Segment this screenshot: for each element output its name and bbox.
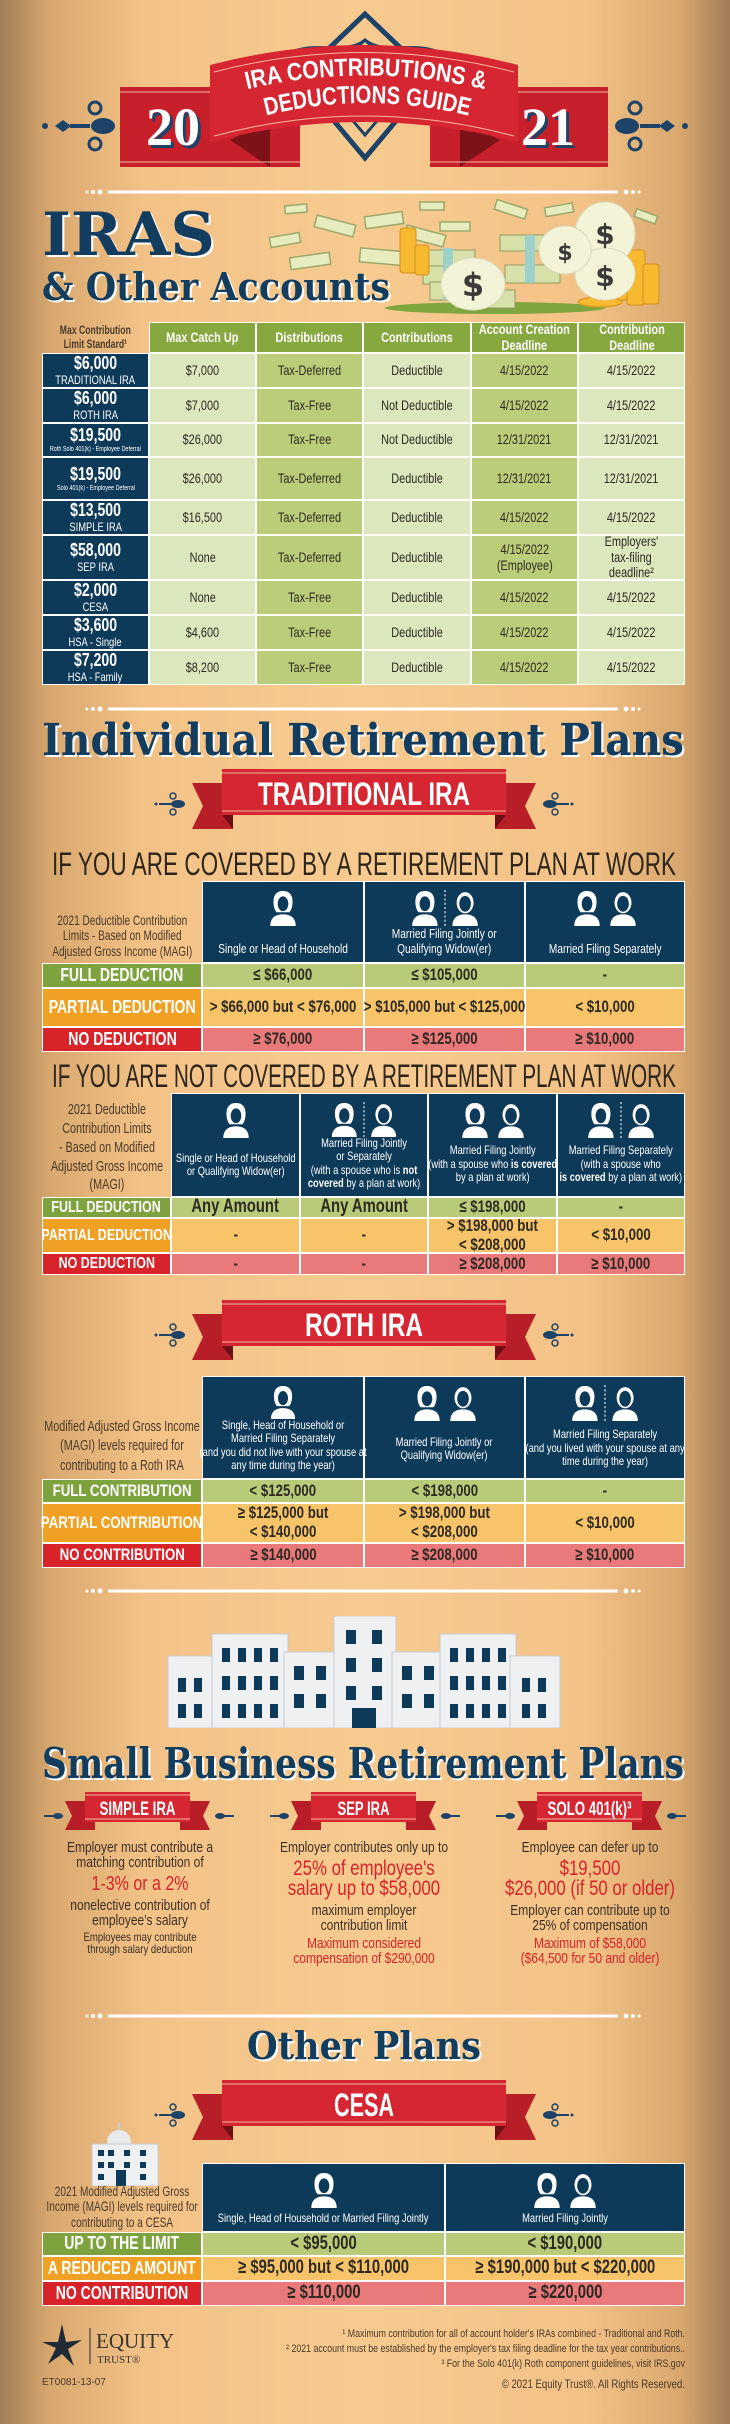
table: CESA: Single, Head of Household or Married Filing Jointly <box>218 2211 429 2225</box>
table: CESA: ≥ $220,000 <box>528 2282 602 2303</box>
table: CESA: < $190,000 <box>528 2233 602 2254</box>
text: SIMPLE IRA details: nonelective contribution of <box>70 1897 210 1914</box>
table: traditional IRA covered: Married Filing Jointly or <box>392 926 497 941</box>
table: Roth IRA: Married Filing Jointly or <box>396 1435 493 1449</box>
header: title banner: 21 <box>521 97 575 157</box>
table: IRAs and other accounts: Account Creation <box>479 321 570 337</box>
table: IRAs and other accounts: 4/15/2022 <box>607 659 656 675</box>
table: traditional IRA covered: Qualifying Widow(er) <box>397 941 492 956</box>
table: traditional IRA covered: Adjusted Gross Income (MAGI) <box>52 943 192 959</box>
panel: SOLO 401(k) <box>496 1792 686 1967</box>
ribbon: SEP IRA <box>270 1792 460 1830</box>
table: IRAs and other accounts: 4/15/2022 <box>607 509 656 525</box>
table: Roth IRA: time during the year) <box>562 1454 648 1468</box>
table: traditional IRA not covered: by a plan at work) <box>456 1170 529 1184</box>
divider <box>86 190 640 194</box>
ribbon: SIMPLE IRA: SIMPLE IRA <box>100 1799 176 1820</box>
table: IRAs and other accounts: Deductible <box>391 549 443 565</box>
table: Roth IRA: ≥ $140,000 <box>250 1545 316 1564</box>
table: traditional IRA covered: Single or Head of Household <box>218 941 348 956</box>
table: IRAs and other accounts: Tax-Deferred <box>278 470 341 486</box>
divider <box>86 706 640 712</box>
table: traditional IRA covered: ≥ $125,000 <box>411 1029 478 1048</box>
table: IRAs and other accounts: Not Deductible <box>381 431 453 447</box>
table: traditional IRA not covered: covered by a plan at work) <box>308 1176 420 1190</box>
table: traditional IRA not covered: Any Amount <box>192 1196 279 1217</box>
table: Roth IRA <box>41 1376 685 1568</box>
table: CESA <box>42 2163 685 2306</box>
table: IRAs and other accounts: 4/15/2022 <box>500 397 549 413</box>
ribbon: CESA <box>154 2080 574 2140</box>
table: traditional IRA covered: 2021 Deductible Contribution <box>57 912 187 928</box>
table: IRAs and other accounts: $26,000 <box>183 470 222 486</box>
table: IRAs and other accounts: HSA - Family <box>68 670 123 684</box>
table: traditional IRA not covered: Contribution Limits <box>62 1120 151 1137</box>
table: IRAs and other accounts: 4/15/2022 <box>500 362 549 378</box>
text: SOLO 401(k) details: ($64,500 for 50 and older) <box>521 1950 659 1967</box>
table: traditional IRA covered: Limits - Based on Modified <box>63 927 181 943</box>
table: IRAs and other accounts: Deductible <box>391 509 443 525</box>
footnotes: © 2021 Equity Trust®. All Rights Reserved. <box>502 2377 685 2391</box>
table: CESA: UP TO THE LIMIT <box>65 2233 179 2253</box>
text: SIMPLE IRA details: Employees may contribute <box>83 1930 197 1944</box>
table: IRAs and other accounts: Deductible <box>391 624 443 640</box>
text: SOLO 401(k) details: Maximum of $58,000 <box>534 1935 646 1952</box>
table: traditional IRA not covered: ≥ $10,000 <box>592 1254 650 1273</box>
table: IRAs and other accounts: TRADITIONAL IRA <box>56 373 135 387</box>
table: IRAs and other accounts: $3,600 <box>74 615 117 635</box>
table: Roth IRA: Single, Head of Household or <box>222 1418 344 1432</box>
table: IRAs and other accounts: 4/15/2022 <box>500 624 549 640</box>
table: IRAs and other accounts: $7,200 <box>74 650 117 670</box>
table: IRAs and other accounts: Tax-Deferred <box>278 509 341 525</box>
table: CESA: ≥ $95,000 but < $110,000 <box>238 2257 409 2278</box>
table: traditional IRA not covered: or Separately <box>336 1149 392 1163</box>
text: SEP IRA details: maximum employer <box>312 1902 416 1919</box>
text: SOLO 401(k) details: Employer can contribute up to <box>510 1902 670 1919</box>
table: traditional IRA not covered: < $10,000 <box>591 1225 651 1244</box>
table: traditional IRA covered: < $10,000 <box>575 997 635 1016</box>
text: SOLO 401(k) details: $26,000 (if 50 or older) <box>505 1877 675 1900</box>
table: IRAs and other accounts: Tax-Deferred <box>278 362 341 378</box>
table: traditional IRA covered: - <box>603 965 607 984</box>
text: SIMPLE IRA details: 1-3% or a 2% <box>92 1873 188 1895</box>
table: IRAs and other accounts: 12/31/2021 <box>604 431 659 447</box>
table: Roth IRA: (and you did not live with your spouse at <box>199 1445 367 1459</box>
table: IRAs and other accounts: (Employee) <box>497 556 552 572</box>
table: CESA: ≥ $110,000 <box>287 2282 360 2303</box>
table: traditional IRA not covered: ≥ $208,000 <box>459 1254 526 1273</box>
table: traditional IRA not covered: - <box>233 1225 238 1244</box>
ribbon: SOLO 401(k): SOLO 401(k)³ <box>548 1799 632 1820</box>
divider <box>86 1588 640 1594</box>
text: SIMPLE IRA details: employee's salary <box>92 1912 188 1929</box>
table: traditional IRA not covered: < $208,000 <box>459 1234 526 1254</box>
text: SEP IRA details: 25% of employee's <box>293 1857 435 1880</box>
table: IRAs and other accounts: $7,000 <box>186 362 219 378</box>
header: title banner: 20 <box>146 97 200 157</box>
table: Roth IRA: (and you lived with your spouse at any <box>525 1441 685 1455</box>
heading: IRAS & Other Accounts: IRAS <box>42 200 215 270</box>
table: IRAs and other accounts: 4/15/2022 <box>500 509 549 525</box>
table: IRAs and other accounts: 4/15/2022 <box>500 541 549 557</box>
text: SEP IRA details: salary up to $58,000 <box>288 1877 440 1900</box>
table: IRAs and other accounts: ROTH IRA <box>73 408 118 422</box>
table: Roth IRA: ≥ $208,000 <box>411 1545 478 1564</box>
table: traditional IRA not covered: Single or Head of Household <box>176 1151 295 1165</box>
table: IRAs and other accounts: Deductible <box>391 362 443 378</box>
illustration: money pile <box>268 198 660 314</box>
table: IRAs and other accounts: $6,000 <box>74 388 117 408</box>
table: IRAs and other accounts: SEP IRA <box>77 560 114 574</box>
table: IRAs and other accounts: Limit Standard¹ <box>64 336 127 350</box>
footnotes: ² 2021 account must be established by the employer's tax filing deadline for the tax year contributions.. <box>286 2343 685 2355</box>
illustration: office buildings <box>168 1616 560 1728</box>
table: traditional IRA not covered: - Based on Modified <box>58 1139 155 1156</box>
table: traditional IRA covered: Married Filing Separately <box>549 941 661 956</box>
table: Roth IRA: < $198,000 <box>411 1481 478 1500</box>
table: traditional IRA covered: ≥ $76,000 <box>254 1029 312 1048</box>
table: traditional IRA covered: ≥ $10,000 <box>576 1029 634 1048</box>
table: IRAs and other accounts: tax-filing <box>611 549 652 565</box>
table: IRAs and other accounts: $6,000 <box>74 353 117 373</box>
table: IRAs and other accounts: Deductible <box>391 659 443 675</box>
table: traditional IRA covered: FULL DEDUCTION <box>61 965 183 985</box>
text: SOLO 401(k) details: Employee can defer up to <box>522 1839 658 1856</box>
table: CESA: Income (MAGI) levels required for <box>46 2198 198 2214</box>
table: IRAs and other accounts: $8,200 <box>186 659 219 675</box>
table: traditional IRA not covered <box>41 1093 685 1275</box>
logo: Equity Trust: TRUST® <box>97 2354 140 2366</box>
text: SEP IRA details: Employer contributes only up to <box>280 1839 448 1856</box>
table: IRAs and other accounts: 4/15/2022 <box>607 589 656 605</box>
table: CESA: A REDUCED AMOUNT <box>48 2258 196 2278</box>
table: IRAs and other accounts: SIMPLE IRA <box>69 520 122 534</box>
logo: Equity Trust <box>42 2324 174 2366</box>
table: IRAs and other accounts: 4/15/2022 <box>607 362 656 378</box>
text: SIMPLE IRA details: through salary deduction <box>87 1942 193 1956</box>
table: IRAs and other accounts: $26,000 <box>183 431 222 447</box>
table: IRAs and other accounts: $19,500 <box>70 464 121 484</box>
ribbon: Traditional IRA: TRADITIONAL IRA <box>258 776 470 812</box>
footnotes: ³ For the Solo 401(k) Roth component guidelines, visit IRS.gov <box>441 2358 685 2370</box>
table: CESA: NO CONTRIBUTION <box>56 2283 188 2303</box>
ribbon: Roth IRA <box>154 1300 574 1360</box>
text: SEP IRA details <box>280 1839 448 1967</box>
table: traditional IRA covered: > $66,000 but < $76,000 <box>210 997 356 1016</box>
table: IRAs and other accounts: 4/15/2022 <box>500 589 549 605</box>
table: IRAs and other accounts: 12/31/2021 <box>604 470 659 486</box>
table: traditional IRA not covered: (with a spouse who is covered <box>428 1157 557 1171</box>
table: traditional IRA not covered: ≤ $198,000 <box>459 1197 526 1216</box>
text: SIMPLE IRA details: Employer must contribute a <box>67 1839 213 1856</box>
header: title banner: IRA CONTRIBUTIONS & <box>244 58 485 89</box>
table: traditional IRA not covered: 2021 Deductible <box>67 1101 146 1118</box>
table: traditional IRA not covered: is covered by a plan at work) <box>560 1170 682 1184</box>
table: traditional IRA not covered: - <box>619 1197 623 1216</box>
table: IRAs and other accounts: Deductible <box>391 470 443 486</box>
table: IRAs and other accounts: None <box>189 549 216 565</box>
table: IRAs and other accounts: Roth Solo 401(k) - Employee Deferral <box>50 446 141 453</box>
table: Roth IRA: (MAGI) levels required for <box>60 1437 184 1454</box>
illustration: money pile: $ <box>557 241 573 266</box>
illustration: money pile: $ <box>595 218 615 251</box>
table: traditional IRA not covered: (with a spouse who <box>581 1157 661 1171</box>
table: IRAs and other accounts: Deadline <box>609 336 654 352</box>
table: IRAs and other accounts: Contributions <box>381 329 453 345</box>
table: IRAs and other accounts: Max Catch Up <box>166 329 239 345</box>
logo: Equity Trust: EQUITY <box>96 2329 174 2353</box>
table: CESA: < $95,000 <box>290 2233 357 2254</box>
table: IRAs and other accounts: $19,500 <box>70 425 121 445</box>
table: IRAs and other accounts: Tax-Free <box>288 589 331 605</box>
table: traditional IRA covered: ≤ $66,000 <box>254 965 312 984</box>
heading: IRAS & Other Accounts: IRAS <box>44 202 217 272</box>
table: IRAs and other accounts: 12/31/2021 <box>497 431 552 447</box>
table: traditional IRA not covered: Any Amount <box>320 1196 408 1217</box>
ribbon: SEP IRA: SEP IRA <box>338 1799 390 1820</box>
table: IRAs and other accounts: $2,000 <box>74 580 117 600</box>
table: Roth IRA: < $125,000 <box>250 1481 316 1500</box>
table: IRAs and other accounts: $58,000 <box>70 540 121 560</box>
table: IRAs and other accounts <box>42 321 685 685</box>
table: CESA: contributing to a CESA <box>71 2214 173 2230</box>
table: IRAs and other accounts: Tax-Free <box>288 397 331 413</box>
table: CESA: Married Filing Jointly <box>522 2211 608 2225</box>
table: IRAs and other accounts: 4/15/2022 <box>607 397 656 413</box>
table: Roth IRA: PARTIAL CONTRIBUTION <box>41 1513 203 1532</box>
table: Roth IRA: < $140,000 <box>250 1522 316 1541</box>
table: traditional IRA covered <box>42 881 685 1052</box>
text: SOLO 401(k) details: $19,500 <box>560 1857 620 1880</box>
table: IRAs and other accounts: Max Contribution <box>60 323 131 337</box>
table: IRAs and other accounts: Deductible <box>391 589 443 605</box>
table: IRAs and other accounts: None <box>189 589 216 605</box>
footnotes <box>286 2328 685 2391</box>
table: Roth IRA: any time during the year) <box>231 1458 335 1472</box>
text: SEP IRA details: Maximum considered <box>307 1935 421 1952</box>
table: traditional IRA covered: > $105,000 but < $125,000 <box>364 997 525 1016</box>
table: IRAs and other accounts: Contribution <box>599 321 664 337</box>
table: traditional IRA not covered: Married Filing Jointly <box>321 1136 407 1150</box>
table: Roth IRA: > $198,000 but <box>399 1503 490 1522</box>
table: IRAs and other accounts: 4/15/2022 <box>607 624 656 640</box>
table: traditional IRA not covered: - <box>362 1254 366 1273</box>
header: title banner: 21 <box>524 100 578 160</box>
table: traditional IRA covered: NO DEDUCTION <box>68 1029 176 1049</box>
table: traditional IRA covered: PARTIAL DEDUCTION <box>49 997 195 1017</box>
table: CESA: ≥ $190,000 but < $220,000 <box>475 2257 655 2278</box>
table: IRAs and other accounts: Deadline <box>502 336 547 352</box>
table: Roth IRA: - <box>603 1481 607 1500</box>
table: Roth IRA: NO CONTRIBUTION <box>59 1545 185 1564</box>
table: IRAs and other accounts: deadline² <box>609 564 654 580</box>
table: Roth IRA: ≥ $125,000 but <box>238 1503 328 1522</box>
table: traditional IRA not covered: (MAGI) <box>89 1176 124 1193</box>
text: SEP IRA details: contribution limit <box>321 1917 407 1934</box>
table: traditional IRA not covered: - <box>362 1225 366 1244</box>
table: traditional IRA not covered: > $198,000 but <box>447 1216 538 1235</box>
table: IRAs and other accounts: $16,500 <box>183 509 222 525</box>
table: IRAs and other accounts: Not Deductible <box>381 397 453 413</box>
header: title banner <box>42 10 688 167</box>
table: IRAs and other accounts: HSA - Single <box>69 635 122 649</box>
table: traditional IRA not covered: Married Filing Separately <box>569 1143 673 1157</box>
table: traditional IRA not covered: (with a spouse who is not <box>311 1163 417 1177</box>
table: traditional IRA not covered: - <box>233 1254 238 1273</box>
ribbon: Roth IRA: ROTH IRA <box>305 1307 423 1343</box>
ribbon: SIMPLE IRA <box>44 1792 234 1830</box>
text: SIMPLE IRA details: matching contribution of <box>76 1854 204 1871</box>
table: Roth IRA: < $208,000 <box>411 1522 478 1541</box>
table: traditional IRA not covered: or Qualifying Widow(er) <box>187 1164 284 1178</box>
table: Roth IRA: Married Filing Separately <box>231 1431 335 1445</box>
table: traditional IRA not covered: Married Filing Jointly <box>450 1143 535 1157</box>
icon: school building <box>92 2122 158 2186</box>
table: traditional IRA not covered: FULL DEDUCTION <box>52 1199 161 1216</box>
text: SOLO 401(k) details: 25% of compensation <box>532 1917 648 1934</box>
text: SEP IRA details: compensation of $290,000 <box>293 1950 435 1967</box>
table: IRAs and other accounts: $7,000 <box>186 397 219 413</box>
table: IRAs and other accounts: Tax-Free <box>288 659 331 675</box>
table: traditional IRA not covered: NO DEDUCTION <box>58 1255 155 1272</box>
footnotes: ¹ Maximum contribution for all of account holder's IRAs combined - Traditional and Roth. <box>342 2328 685 2340</box>
table: traditional IRA covered: ≤ $105,000 <box>411 965 478 984</box>
ribbon: CESA: CESA <box>334 2087 394 2123</box>
panel: SEP IRA <box>270 1792 460 1967</box>
header: title banner: 20 <box>149 100 203 160</box>
table: IRAs and other accounts: CESA <box>83 600 108 614</box>
table: IRAs and other accounts: 4/15/2022 <box>500 659 549 675</box>
table: IRAs and other accounts: 12/31/2021 <box>497 470 552 486</box>
table: IRAs and other accounts: Tax-Deferred <box>278 549 341 565</box>
table: Roth IRA: ≥ $10,000 <box>576 1545 634 1564</box>
divider <box>86 2014 640 2018</box>
text: SIMPLE IRA details <box>67 1839 214 1956</box>
table: Roth IRA: FULL CONTRIBUTION <box>53 1481 191 1500</box>
table: IRAs and other accounts: Distributions <box>276 329 343 345</box>
table: Roth IRA: Married Filing Separately <box>553 1427 657 1441</box>
table: CESA: 2021 Modified Adjusted Gross <box>55 2183 189 2199</box>
ribbon: Traditional IRA <box>154 769 574 829</box>
ribbon: SOLO 401(k) <box>496 1792 686 1830</box>
table: traditional IRA not covered: Adjusted Gross Income <box>50 1158 163 1174</box>
table: IRAs and other accounts: Employers' <box>605 533 658 549</box>
panel: SIMPLE IRA <box>44 1792 234 1956</box>
text: SOLO 401(k) details <box>505 1839 675 1967</box>
table: traditional IRA not covered: PARTIAL DEDUCTION <box>41 1227 172 1244</box>
illustration: money pile: $ <box>595 260 615 293</box>
heading: IRAS & Other Accounts <box>42 200 392 306</box>
table: Roth IRA: Qualifying Widow(er) <box>401 1448 488 1462</box>
header: title banner: DEDUCTIONS GUIDE <box>263 86 472 116</box>
table: IRAs and other accounts: $13,500 <box>70 500 121 520</box>
text: document code: ET0081-13-07 <box>42 2377 106 2388</box>
table: IRAs and other accounts: Solo 401(k) - Employee Deferral <box>56 485 134 492</box>
table: IRAs and other accounts: Tax-Free <box>288 624 331 640</box>
table: IRAs and other accounts: Tax-Free <box>288 431 331 447</box>
illustration: money pile: $ <box>462 266 484 304</box>
table: Roth IRA: contributing to a Roth IRA <box>60 1456 184 1474</box>
table: IRAs and other accounts: $4,600 <box>186 624 219 640</box>
table: Roth IRA: < $10,000 <box>575 1513 635 1532</box>
table: Roth IRA: Modified Adjusted Gross Income <box>44 1418 200 1434</box>
